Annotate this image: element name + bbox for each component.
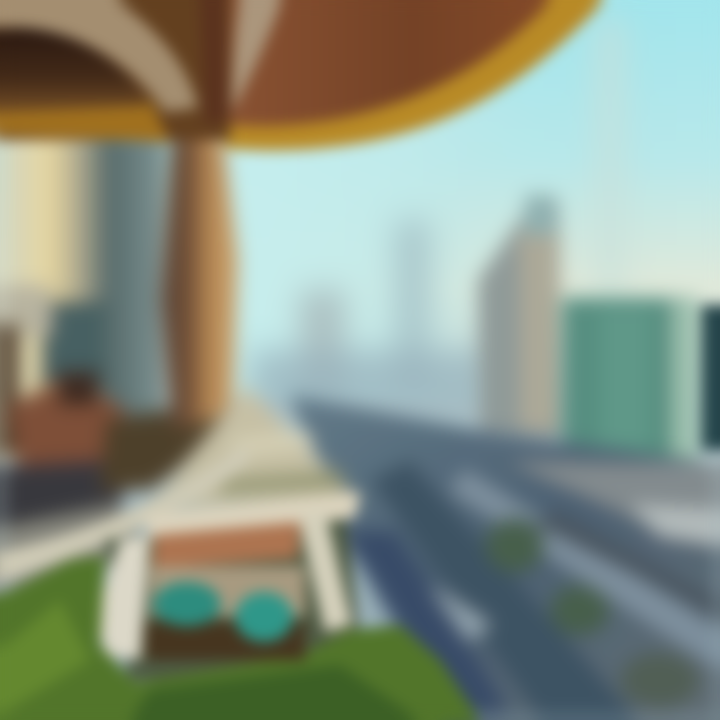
left window pane	[0, 132, 165, 462]
pale terrace floor	[150, 385, 362, 510]
city ground and roads	[290, 395, 720, 720]
tall beige tower	[478, 195, 564, 440]
interior furniture reflection	[0, 325, 230, 590]
brown ceiling disc	[200, 0, 552, 126]
distant skyline	[250, 20, 625, 420]
foliage	[0, 555, 480, 720]
left arch and gold band	[0, 0, 282, 142]
dark building at right edge	[702, 305, 720, 450]
gold ceiling rim	[220, 0, 605, 150]
terrace table with white frame	[95, 492, 360, 660]
teal cushions on seat	[145, 582, 305, 660]
central column	[160, 128, 238, 430]
dark backing under table	[105, 510, 360, 680]
green glass building	[562, 298, 700, 468]
curved white balcony rail	[0, 445, 250, 582]
